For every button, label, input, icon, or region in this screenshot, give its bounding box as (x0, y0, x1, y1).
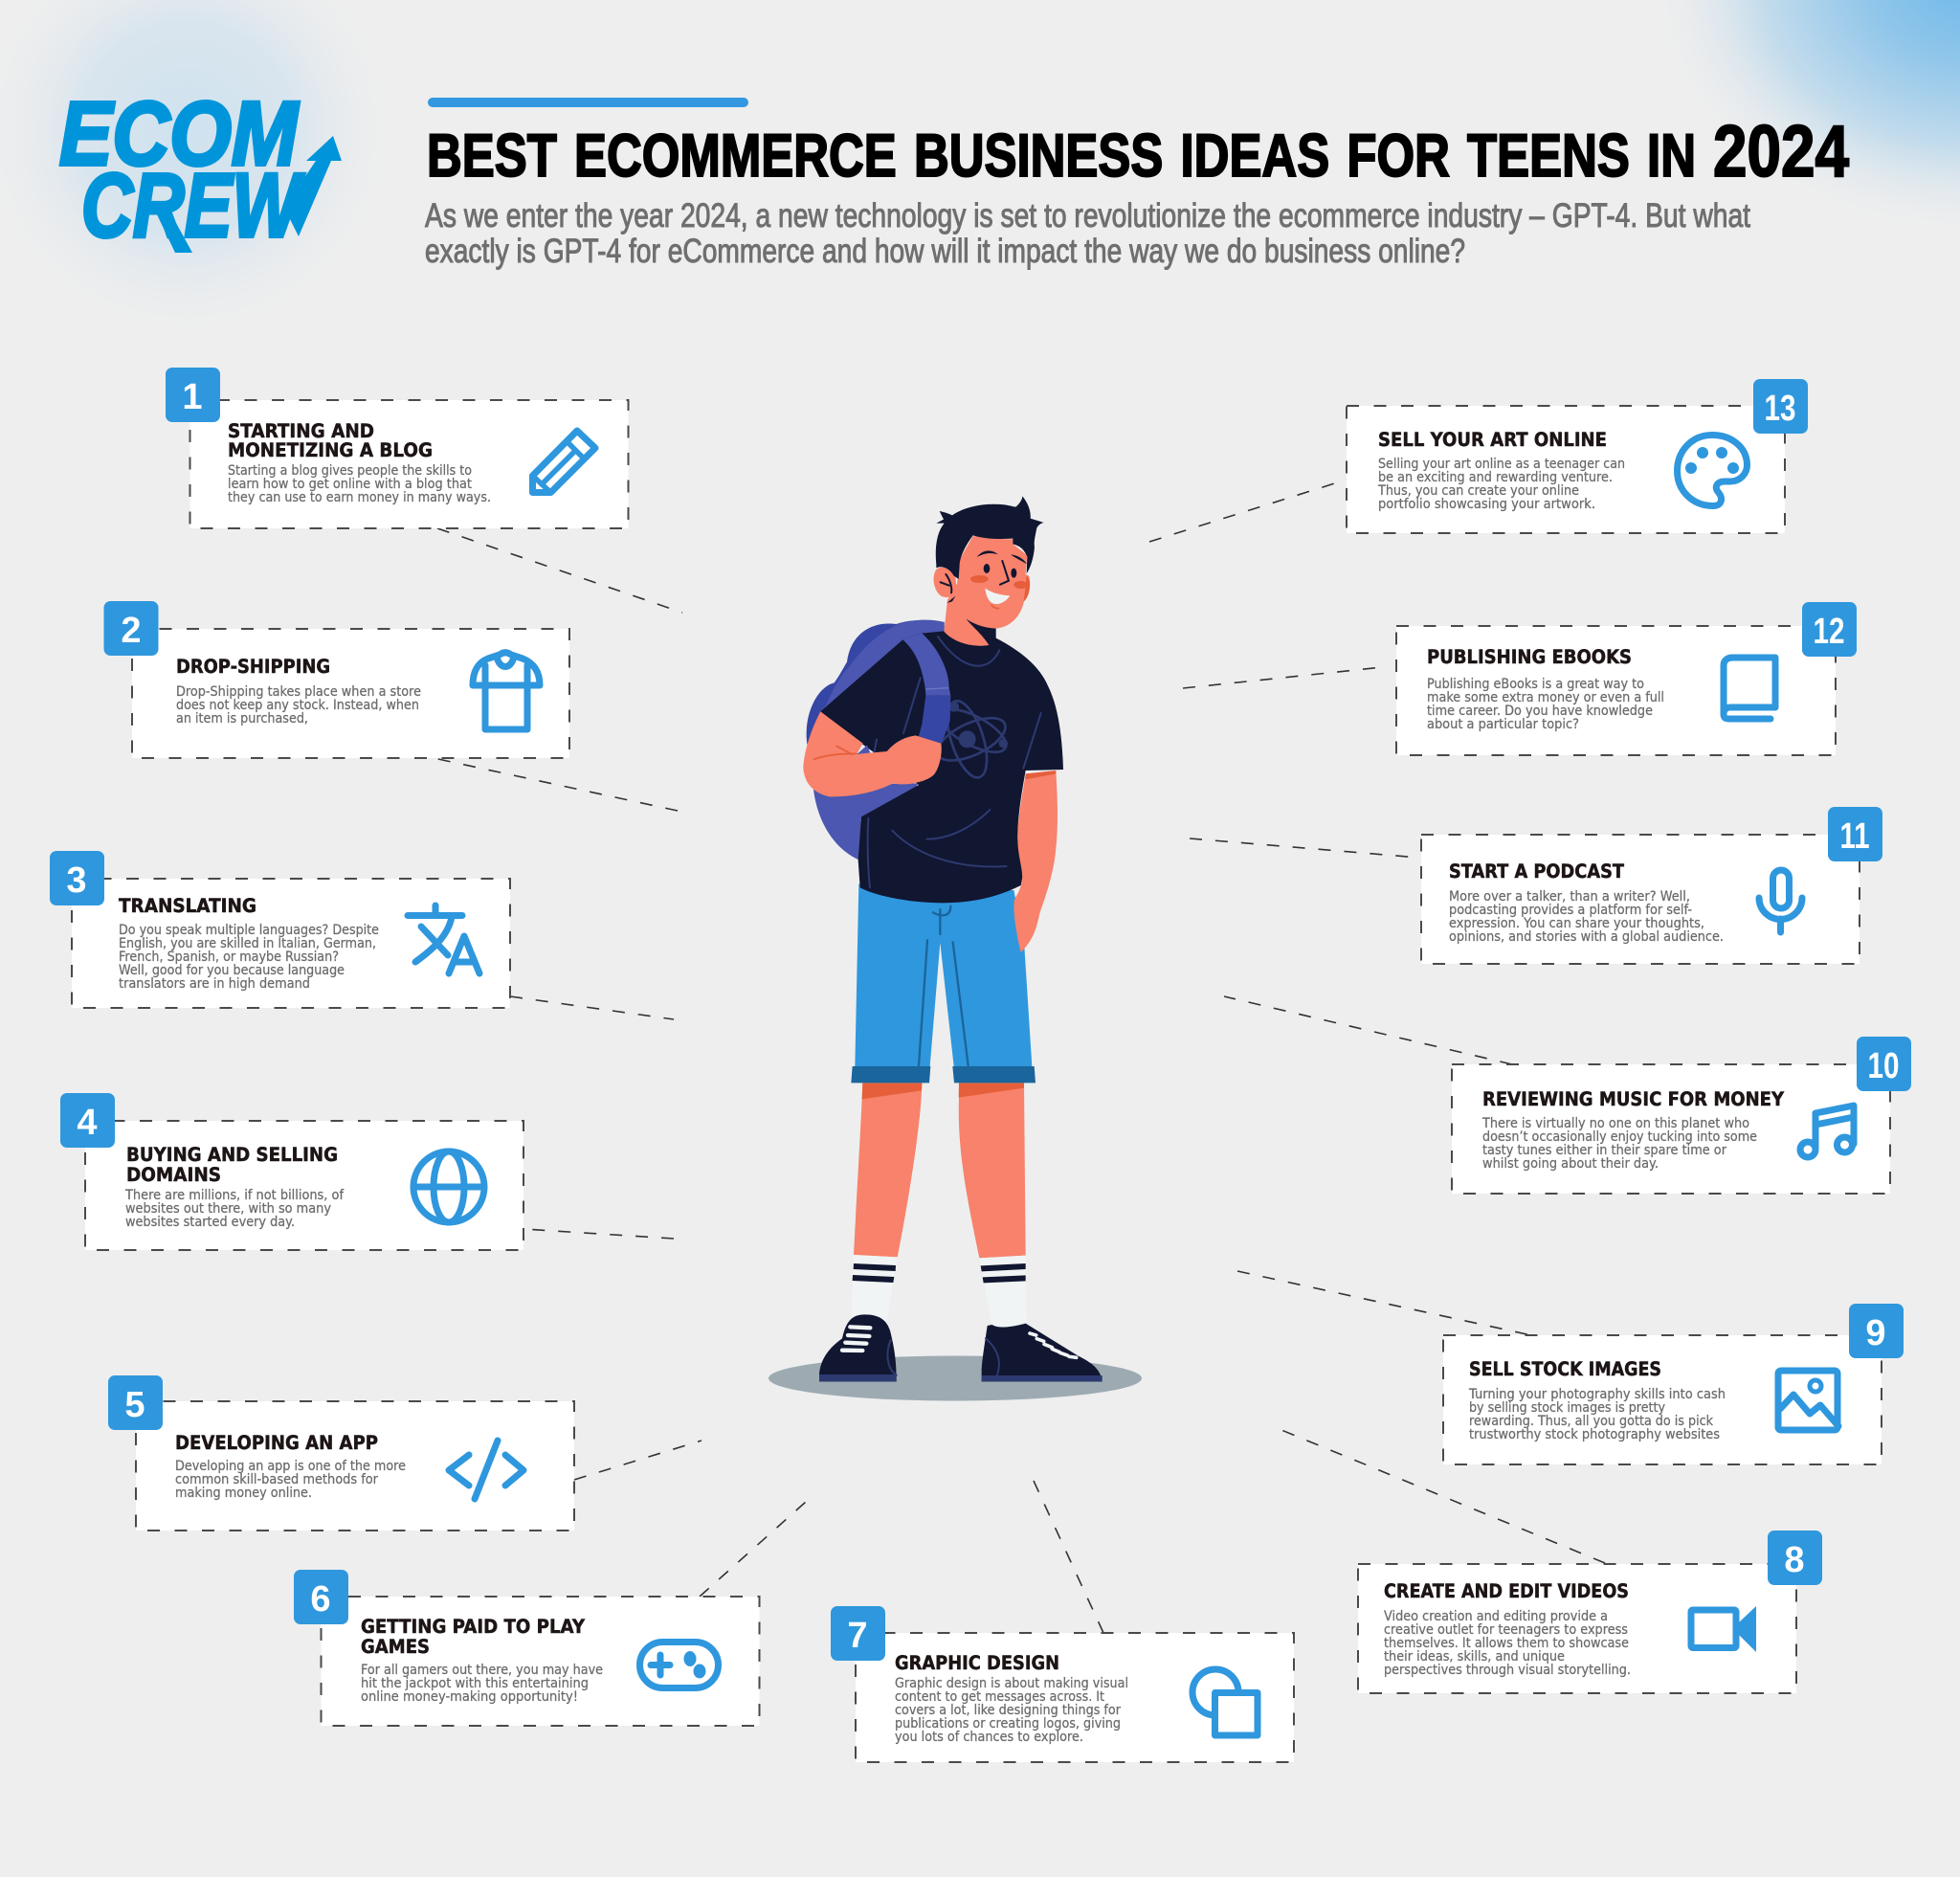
badge 4 (60, 1093, 115, 1148)
icon: microphone (1759, 870, 1802, 932)
badge 2: 2 (121, 611, 142, 651)
text 10: tasty tunes either in their spare time or (1482, 1143, 1726, 1158)
legs, shorts and shoes (819, 883, 1102, 1381)
text 3: English, you are skilled in Italian, German, (119, 936, 376, 951)
icon: video camera (1691, 1606, 1756, 1652)
badge 11: 11 (1839, 816, 1870, 857)
badge 12 (1802, 602, 1857, 657)
subtitle (425, 197, 1750, 270)
badge 13: 13 (1765, 389, 1795, 429)
title: BEST ECOMMERCE BUSINESS IDEAS FOR TEENS IN (427, 123, 1696, 190)
panel: 1 blog (166, 368, 628, 528)
icon: gamepad (639, 1642, 718, 1688)
connector lines (434, 476, 1605, 1633)
badge 8 (1768, 1531, 1822, 1585)
text 6: hit the jackpot with this entertaining (361, 1676, 589, 1691)
badge 4: 4 (77, 1103, 98, 1143)
panel: 8 videos (1358, 1531, 1822, 1693)
text 6: online money-making opportunity! (361, 1689, 578, 1705)
badge 12: 12 (1813, 612, 1845, 652)
text 1: learn how to get online with a blog that (228, 477, 472, 492)
icon: image (1778, 1371, 1838, 1430)
text 12 (1427, 677, 1664, 732)
text 11: opinions, and stories with a global audience. (1449, 929, 1724, 945)
text 7: covers a lot, like designing things for (895, 1703, 1121, 1718)
torso, arms and head (803, 496, 1063, 952)
text 12: make some extra money or even a full (1427, 690, 1664, 705)
text 3: translators are in high demand (119, 976, 310, 992)
text 7: Graphic design is about making visual (895, 1676, 1128, 1691)
badge 3 (50, 851, 104, 905)
text 7 (895, 1676, 1128, 1745)
text 8: themselves. It allows them to showcase (1384, 1636, 1629, 1651)
badge 1: 1 (182, 377, 203, 417)
badge 10: 10 (1868, 1046, 1899, 1086)
badge 3: 3 (66, 860, 87, 901)
badge 7: 7 (847, 1616, 868, 1656)
logo: Ecom Crew: ECOM (59, 83, 300, 185)
text 9: Turning your photography skills into cash (1468, 1387, 1726, 1402)
icon: code (449, 1441, 523, 1499)
text 6: For all gamers out there, you may have (361, 1663, 603, 1678)
text 7: you lots of chances to explore. (895, 1730, 1083, 1745)
text 9 (1468, 1387, 1726, 1442)
badge 6: 6 (310, 1579, 331, 1620)
heading 1 (228, 420, 433, 461)
heading 4: DOMAINS (126, 1164, 221, 1186)
panel: 3 translating (50, 851, 510, 1008)
icon: palette (1677, 435, 1748, 505)
subtitle: exactly is GPT-4 for eCommerce and how will it impact the way we do business online? (425, 233, 1465, 270)
heading 10: REVIEWING MUSIC FOR MONEY (1482, 1088, 1785, 1110)
text 12: time career. Do you have knowledge (1427, 704, 1653, 719)
text 13: be an exciting and rewarding venture. (1378, 470, 1613, 485)
text 8: creative outlet for teenagers to express (1384, 1622, 1628, 1638)
text 4: websites out there, with so many (125, 1201, 331, 1217)
panel: 9 stock images (1443, 1304, 1904, 1464)
badge 5 (108, 1375, 163, 1430)
text 9: trustworthy stock photography websites (1469, 1427, 1720, 1442)
logo: Ecom Crew: CREW (81, 155, 305, 257)
badge 2 (103, 601, 159, 656)
panel: 6 games (294, 1570, 760, 1726)
badge 1 (166, 368, 220, 422)
text 4: There are millions, if not billions, of (124, 1188, 345, 1203)
text 8: Video creation and editing provide a (1384, 1609, 1608, 1624)
text 3: French, Spanish, or maybe Russian? (119, 950, 339, 965)
title: 2024 (1713, 111, 1849, 192)
icon: music note (1800, 1106, 1854, 1157)
badge 6 (294, 1570, 348, 1624)
text 6 (361, 1663, 603, 1705)
text 1: they can use to earn money in many ways. (228, 490, 491, 505)
text 7: content to get messages across. It (895, 1689, 1104, 1705)
icon: book (1724, 658, 1775, 719)
panel: 2 drop-shipping (103, 601, 569, 758)
icon: globe (413, 1151, 484, 1222)
heading 6 (361, 1616, 586, 1658)
heading 1: STARTING AND (228, 420, 374, 442)
heading 8: CREATE AND EDIT VIDEOS (1384, 1580, 1629, 1602)
text 11 (1449, 889, 1724, 945)
text 8: their ideas, skills, and unique (1384, 1649, 1565, 1665)
heading 4: BUYING AND SELLING (126, 1144, 338, 1166)
text 2: Drop-Shipping takes place when a store (176, 684, 421, 700)
text 10: doesn’t occasionally enjoy tucking into some (1482, 1129, 1757, 1145)
heading 6: GETTING PAID TO PLAY (361, 1616, 586, 1638)
text 13: portfolio showcasing your artwork. (1378, 497, 1595, 512)
text 2: does not keep any stock. Instead, when (176, 698, 419, 713)
badge 10 (1857, 1037, 1911, 1091)
ground shadow (768, 1355, 1142, 1401)
panel: 12 ebooks (1396, 602, 1857, 755)
logo: Ecom Crew (59, 83, 342, 257)
text 13: Thus, you can create your online (1377, 483, 1579, 499)
text 10: whilst going about their day. (1482, 1156, 1659, 1172)
heading 13: SELL YOUR ART ONLINE (1378, 429, 1607, 451)
heading 11: START A PODCAST (1449, 860, 1625, 883)
text 9: by selling stock images is pretty (1469, 1400, 1665, 1416)
heading 1: MONETIZING A BLOG (228, 439, 433, 461)
text 10 (1481, 1116, 1757, 1172)
panel: 7 graphic design (831, 1606, 1294, 1762)
text 11: More over a talker, than a writer? Well, (1449, 889, 1690, 905)
heading 2: DROP-SHIPPING (176, 656, 330, 678)
text 3 (119, 923, 379, 992)
text 9: rewarding. Thus, all you gotta do is pick (1469, 1414, 1714, 1429)
title accent bar (428, 98, 748, 107)
text 2: an item is purchased, (176, 711, 308, 726)
text 12: about a particular topic? (1427, 717, 1579, 732)
heading 7: GRAPHIC DESIGN (895, 1652, 1059, 1674)
icon: shapes (1192, 1669, 1258, 1735)
text 1: Starting a blog gives people the skills to (228, 463, 472, 479)
heading 9: SELL STOCK IMAGES (1469, 1358, 1661, 1380)
text 11: expression. You can share your thoughts, (1449, 916, 1704, 931)
text 5: common skill-based methods for (175, 1472, 378, 1487)
badge 9 (1849, 1304, 1904, 1358)
badge 13 (1753, 379, 1808, 434)
text 8 (1384, 1609, 1631, 1678)
badge 5: 5 (124, 1385, 145, 1425)
icon: pencil (532, 431, 595, 492)
text 10: There is virtually no one on this planet who (1481, 1116, 1749, 1131)
badge 7 (831, 1606, 885, 1661)
heading 12: PUBLISHING EBOOKS (1427, 646, 1632, 668)
text 8: perspectives through visual storytelling. (1384, 1663, 1631, 1678)
illustration: teen with backpack (768, 496, 1142, 1401)
icon: t-shirt (473, 653, 540, 729)
text 11: podcasting provides a platform for self- (1449, 903, 1692, 918)
badge 9: 9 (1865, 1313, 1886, 1353)
text 5: Developing an app is one of the more (175, 1459, 406, 1474)
badge 11 (1828, 807, 1882, 861)
heading 6: GAMES (361, 1636, 430, 1658)
panel: 11 podcast (1421, 807, 1882, 964)
text 1 (228, 463, 491, 505)
text 4 (124, 1188, 345, 1230)
text 13 (1377, 457, 1625, 512)
text 5 (175, 1459, 406, 1501)
heading 5: DEVELOPING AN APP (175, 1432, 378, 1454)
text 2 (176, 684, 421, 726)
text 7: publications or creating logos, giving (895, 1716, 1121, 1732)
panel: 10 music (1452, 1037, 1911, 1194)
text 13: Selling your art online as a teenager can (1378, 457, 1625, 472)
panel: 4 domains (60, 1093, 523, 1250)
heading 3: TRANSLATING (119, 895, 256, 917)
text 12: Publishing eBooks is a great way to (1427, 677, 1644, 692)
text 3: Do you speak multiple languages? Despite (119, 923, 379, 938)
text 5: making money online. (175, 1486, 312, 1501)
icon: translate (408, 905, 479, 973)
badge 8: 8 (1784, 1540, 1805, 1580)
panel: 5 app (108, 1375, 574, 1531)
text 3: Well, good for you because language (119, 963, 345, 978)
text 4: websites started every day. (125, 1215, 295, 1230)
heading 4 (126, 1144, 338, 1186)
panel: 13 art (1347, 379, 1808, 533)
